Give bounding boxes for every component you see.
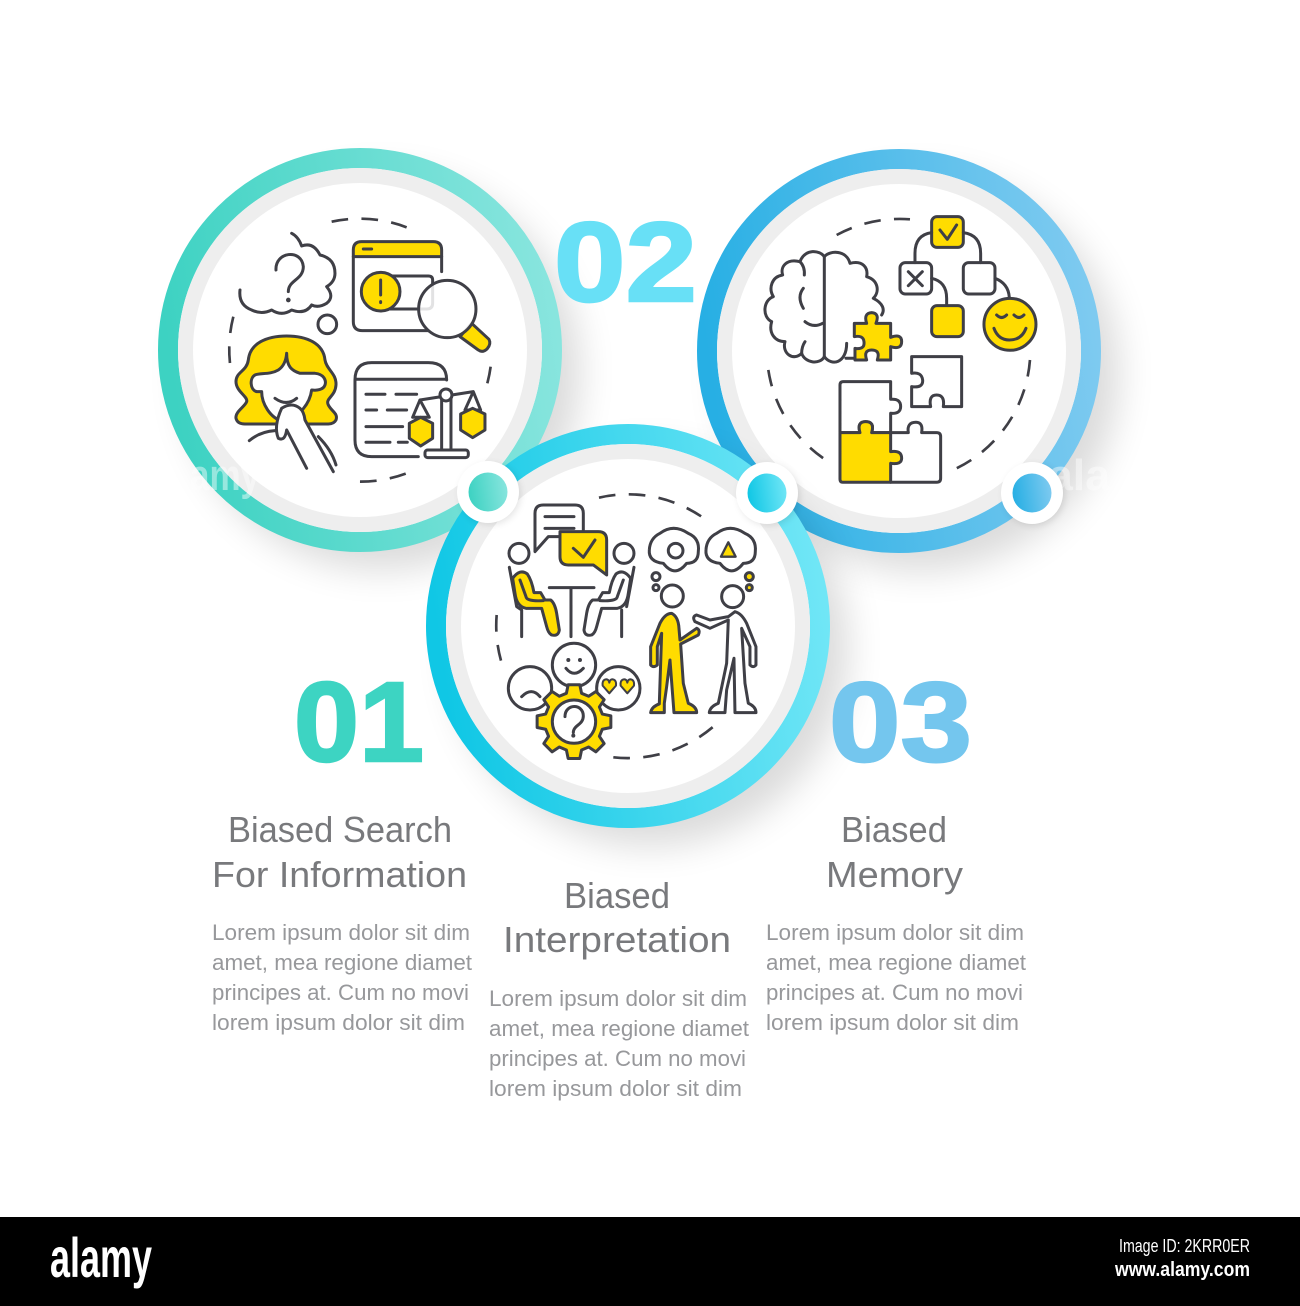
panel: circle 2 biased memory: [707, 159, 1119, 571]
icon: conversation, emotions gear and two people: [496, 494, 756, 758]
body text 1: [212, 920, 472, 1035]
heading: biased interpretation: [503, 875, 731, 960]
body text 2: Lorem ipsum dolor sit dim: [489, 986, 747, 1011]
panel: circle 1 biased search: [168, 158, 580, 570]
panel: circle 3 biased interpretation: [436, 434, 848, 846]
text block: biased search: [212, 809, 472, 1035]
body text 3: Lorem ipsum dolor sit dim: [766, 920, 1024, 945]
number 03: 03: [829, 659, 972, 785]
dot connector 3: [1001, 462, 1064, 525]
text block: biased interpretation: [489, 875, 749, 1101]
image id: Image ID: 2KRR0ER: [1119, 1236, 1250, 1256]
body text 3: [766, 920, 1026, 1035]
body text 2: principes at. Cum no movi: [489, 1046, 746, 1071]
heading: biased memory: Memory: [826, 854, 963, 895]
watermark on ring 2: ala: [1048, 451, 1111, 500]
heading: biased search for information: For Information: [212, 854, 467, 895]
body text 1: lorem ipsum dolor sit dim: [212, 1010, 465, 1035]
heading: biased memory: [826, 809, 963, 895]
heading: biased search for information: Biased Search: [228, 809, 452, 850]
body text 3: principes at. Cum no movi: [766, 980, 1023, 1005]
number 01: 01: [294, 659, 424, 785]
text block: biased memory: [766, 809, 1026, 1035]
body text 1: principes at. Cum no movi: [212, 980, 469, 1005]
dot connector 1: [457, 461, 520, 524]
number 02: 02: [554, 199, 697, 325]
body text 3: amet, mea regione diamet: [766, 950, 1026, 975]
dot connector 2: [736, 462, 799, 525]
heading: biased memory: Biased: [841, 809, 947, 850]
body text 2: lorem ipsum dolor sit dim: [489, 1076, 742, 1101]
watermark on ring 1: amy: [190, 451, 260, 500]
body text 1: amet, mea regione diamet: [212, 950, 472, 975]
heading: biased interpretation: Biased: [564, 875, 670, 916]
body text 1: Lorem ipsum dolor sit dim: [212, 920, 470, 945]
footer bar: [0, 1217, 1300, 1306]
heading: biased interpretation: Interpretation: [503, 919, 731, 960]
body text 2: [489, 986, 749, 1101]
body text 2: amet, mea regione diamet: [489, 1016, 749, 1041]
icon: woman thinking, browser search and scales: [229, 219, 491, 482]
website: www.alamy.com: [1114, 1259, 1250, 1281]
heading: biased search for information: [212, 809, 467, 895]
body text 3: lorem ipsum dolor sit dim: [766, 1010, 1019, 1035]
icon: brain, puzzle and decision flow: [765, 217, 1036, 482]
footer logo: alamy: [50, 1226, 152, 1289]
